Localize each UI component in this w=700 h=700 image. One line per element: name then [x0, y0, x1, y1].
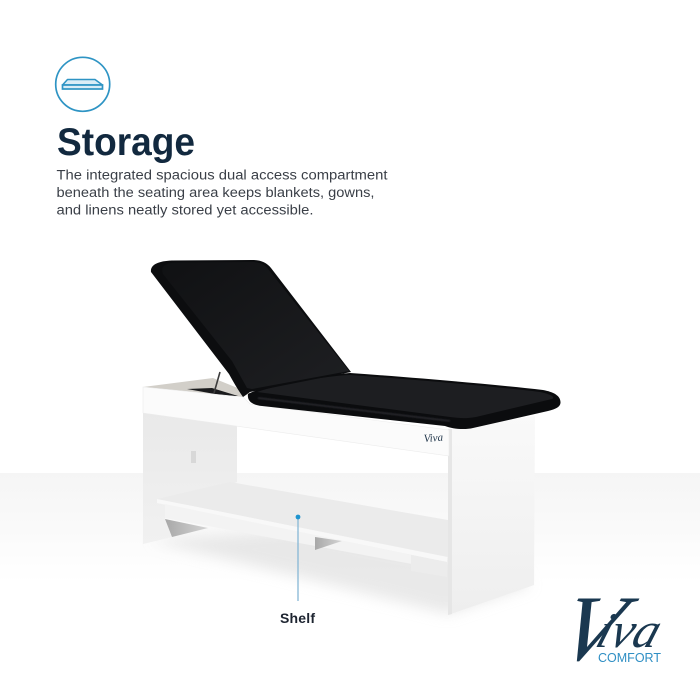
- shelf front edge: [157, 499, 447, 562]
- small rail logo: Viva: [423, 432, 444, 445]
- center shadow wedge: [315, 537, 342, 550]
- backrest: [151, 260, 351, 397]
- left shadow wedge: [165, 519, 208, 537]
- logo: Viva Comfort: iva: [590, 603, 669, 659]
- compartment opening: [143, 378, 250, 397]
- right panel edge: [448, 429, 452, 615]
- exam table: [143, 260, 561, 615]
- shelf bracket right: [411, 555, 447, 577]
- floor background band: [0, 473, 700, 583]
- title: Storage: [57, 121, 195, 164]
- seat roll highlight: [258, 398, 450, 421]
- support arm: [214, 372, 220, 393]
- top rail: [143, 387, 449, 456]
- left end panel: [143, 412, 237, 544]
- seat corner highlight: [460, 420, 470, 424]
- backrest face: [162, 262, 349, 389]
- body text: and linens neatly stored yet accessible.: [56, 202, 314, 218]
- body text: The integrated spacious dual access compartment: [56, 168, 388, 182]
- callout: shelf: Shelf: [280, 610, 315, 626]
- callout: shelf: [280, 515, 315, 626]
- icon: shelf in circle: [56, 57, 110, 111]
- body text: beneath the seating area keeps blankets, gowns,: [56, 185, 374, 200]
- seat cushion: [248, 373, 561, 429]
- floor shadow: [150, 530, 530, 614]
- seat top surface: [257, 375, 553, 418]
- bracket on left panel: [191, 451, 196, 463]
- right end panel: [448, 416, 535, 615]
- logo: Viva Comfort: [546, 576, 678, 680]
- body text: [56, 168, 388, 218]
- logo: Viva Comfort: COMFORT: [598, 650, 661, 665]
- shelf skirt: [165, 504, 412, 564]
- shelf top: [157, 482, 448, 557]
- logo: Viva Comfort: V: [546, 576, 647, 680]
